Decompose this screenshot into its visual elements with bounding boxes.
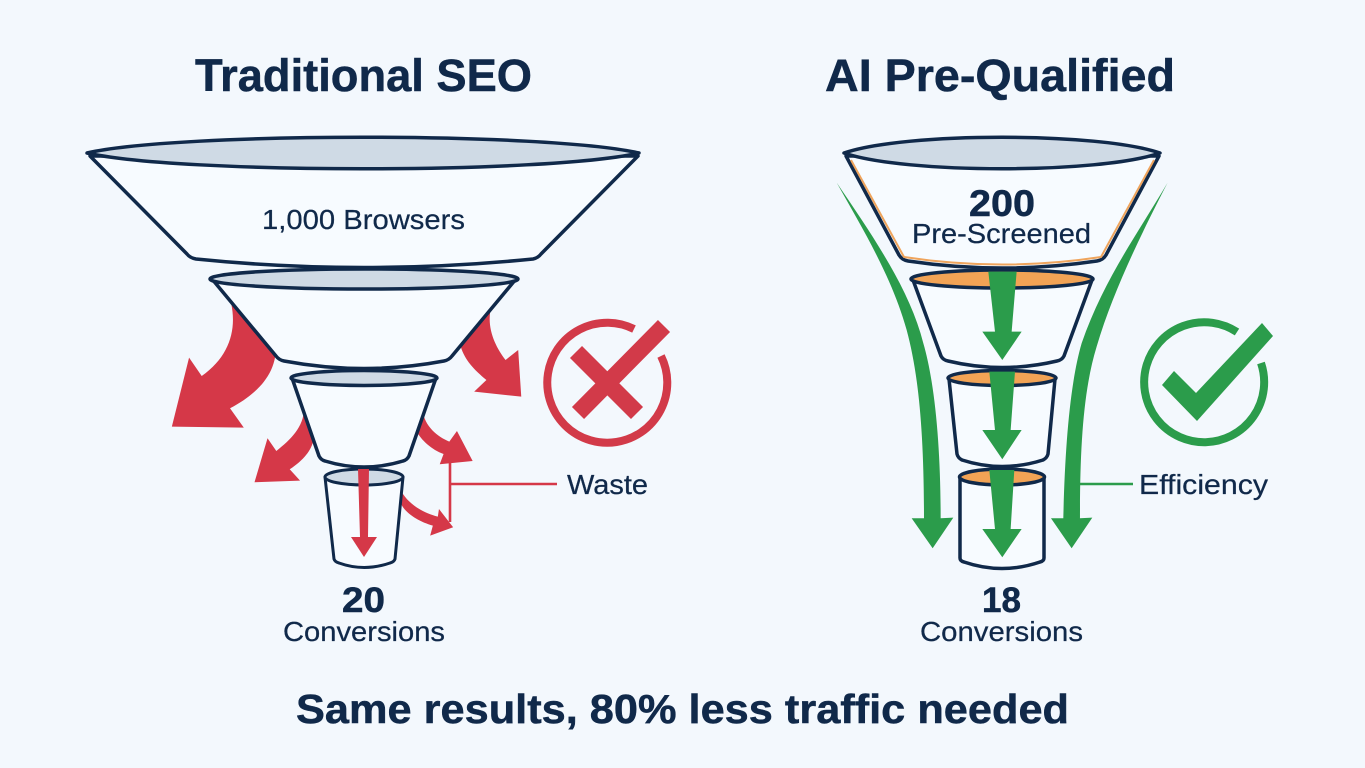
funnel stage 3 <box>291 370 437 467</box>
panel: traditional SEO funnel <box>87 137 667 647</box>
funnel stage 3 <box>948 370 1056 466</box>
arrow: red centre down arrow <box>351 469 377 557</box>
icon: green check in circle <box>1144 322 1273 442</box>
funnel stage 1: 1,000 browsers <box>87 137 639 268</box>
red waste arrows <box>172 303 521 536</box>
title: Traditional SEO: Traditional SEO <box>195 50 532 101</box>
label: 1,000 Browsers: 1,000 Browsers <box>262 204 465 235</box>
funnel stage 2 <box>911 270 1093 368</box>
title: AI Pre-Qualified: AI Pre-Qualified <box>825 50 1175 101</box>
funnel stage 4 <box>960 469 1044 568</box>
funnel stage 2 <box>210 269 518 368</box>
funnel stage 4 <box>325 469 403 568</box>
label: Efficiency: Efficiency <box>1139 469 1268 500</box>
icon: red cross in circle <box>547 323 667 443</box>
stat: 18 conversions: Conversions <box>920 616 1083 647</box>
leader line: efficiency <box>1080 483 1133 485</box>
stat: 18 conversions: 18 <box>982 581 1021 620</box>
stat: 200 pre-screened: 200 <box>969 183 1035 224</box>
stat: 20 conversions: Conversions <box>283 616 445 647</box>
funnel stage 1: 200 pre-screened <box>844 137 1160 268</box>
leader line: waste <box>450 463 557 522</box>
panel: AI pre-qualified funnel <box>837 137 1273 647</box>
stat: 200 pre-screened <box>912 183 1091 249</box>
stat: 18 conversions <box>920 581 1083 647</box>
stat: 200 pre-screened: Pre-Screened <box>912 218 1091 249</box>
stat: 20 conversions <box>283 581 445 647</box>
green flow arrows <box>837 183 1168 557</box>
footer takeaway: Same results, 80% less traffic needed <box>296 686 1069 732</box>
stat: 20 conversions: 20 <box>342 581 385 620</box>
label: Waste: Waste <box>567 469 648 500</box>
